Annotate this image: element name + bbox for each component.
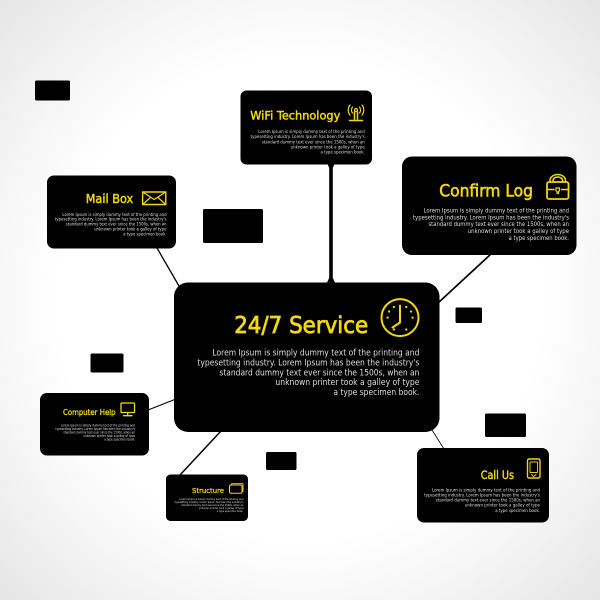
icon: wifi antenna <box>348 105 364 120</box>
body text: standard dummy text ever since the 1500s, when an <box>436 498 540 504</box>
body text: a type specimen book. <box>333 388 419 398</box>
body text: unknown printer took a galley of type <box>468 228 569 235</box>
body text: Lorem Ipsum is simply dummy text of the printing and <box>212 349 419 359</box>
body text: typesetting industry. Lorem Ipsum has been the industry's <box>175 500 244 504</box>
body text: typesetting industry. Lorem Ipsum has been the industry's <box>413 214 569 221</box>
body text: typesetting industry. Lorem Ipsum has been the industry's <box>55 217 167 223</box>
body text <box>175 497 244 513</box>
body text: Lorem Ipsum is simply dummy text of the printing and <box>258 129 365 135</box>
heading: WiFi Technology: WiFi Technology <box>250 108 340 122</box>
body text: unknown printer took a galley of type <box>199 506 244 510</box>
heading: Mail Box: Mail Box <box>86 192 133 206</box>
body text: standard dummy text ever since the 1500s, when an <box>219 368 419 378</box>
heading: Computer Help: Computer Help <box>63 408 116 417</box>
icon: folder <box>230 484 243 493</box>
body text: a type specimen book. <box>217 509 243 513</box>
panel: Call Us <box>417 448 549 522</box>
panel: 24/7 Service <box>174 282 440 432</box>
body text: unknown printer took a galley of type <box>291 144 365 150</box>
heading: Structure: Structure <box>192 487 224 495</box>
icon: padlock <box>547 174 568 199</box>
body text: unknown printer took a galley of type <box>275 378 420 388</box>
body text: Lorem Ipsum is simply dummy text of the printing and <box>432 487 540 493</box>
body text: Lorem Ipsum is simply dummy text of the printing and <box>179 497 244 501</box>
panel: Mail Box <box>47 176 176 248</box>
body text: standard dummy text ever since the 1500s, when an <box>63 430 135 434</box>
connector: WiFi to main <box>327 164 335 282</box>
heading: Confirm Log: Confirm Log <box>439 181 533 200</box>
connector: computer help to main <box>148 399 176 410</box>
panel: Confirm Log <box>402 156 576 255</box>
blank tag 4 <box>90 354 124 372</box>
body text <box>55 212 167 238</box>
body text: a type specimen book. <box>495 508 540 514</box>
body text: Lorem Ipsum is simply dummy text of the printing and <box>61 423 135 427</box>
connector: structure to main <box>180 431 221 475</box>
body text <box>56 423 135 441</box>
blank tag 6 <box>266 452 296 470</box>
body text: typesetting industry. Lorem Ipsum has been the industry's <box>251 134 365 140</box>
body text: Lorem Ipsum is simply dummy text of the printing and <box>62 212 167 218</box>
body text: a type specimen book. <box>123 232 166 238</box>
heading: Call Us: Call Us <box>481 468 514 482</box>
body text: a type specimen book. <box>320 149 365 155</box>
body text: standard dummy text ever since the 1500s, when an <box>262 139 365 145</box>
panel: Structure <box>166 474 248 521</box>
body text: a type specimen book. <box>104 437 135 441</box>
icon: phone <box>528 459 540 478</box>
body text: unknown printer took a galley of type <box>83 434 135 438</box>
body text: a type specimen book. <box>509 235 569 242</box>
body text <box>251 129 365 155</box>
connector: call us to main <box>432 430 444 449</box>
connector: mail to main <box>157 248 179 286</box>
body text: unknown printer took a galley of type <box>465 503 540 509</box>
blank tag 2 <box>203 209 263 243</box>
body text: Lorem Ipsum is simply dummy text of the printing and <box>423 207 569 214</box>
panel: Computer Help <box>40 393 149 456</box>
icon: monitor <box>121 403 134 416</box>
body text <box>413 207 569 242</box>
body text: standard dummy text ever since the 1500s, when an <box>66 222 167 228</box>
body text <box>197 349 420 398</box>
icon: envelope <box>143 192 166 204</box>
icon: clock <box>382 299 418 336</box>
body text: typesetting industry. Lorem Ipsum has been the industry's <box>56 427 135 431</box>
body text: standard dummy text ever since the 1500s, when an <box>428 221 569 228</box>
blank tag 5 <box>485 414 526 437</box>
body text: typesetting industry. Lorem Ipsum has been the industry's <box>197 359 420 369</box>
connector: confirm log to main <box>438 254 491 303</box>
panel: WiFi Technology <box>240 90 372 164</box>
body text: unknown printer took a galley of type <box>94 227 167 233</box>
body text <box>424 487 540 514</box>
body text: standard dummy text ever since the 1500s, when an <box>181 503 244 507</box>
blank tag 1 <box>35 80 70 100</box>
blank tag 3 <box>456 308 482 323</box>
body text: typesetting industry. Lorem Ipsum has been the industry's <box>424 493 540 499</box>
heading: 24/7 Service: 24/7 Service <box>234 313 368 339</box>
